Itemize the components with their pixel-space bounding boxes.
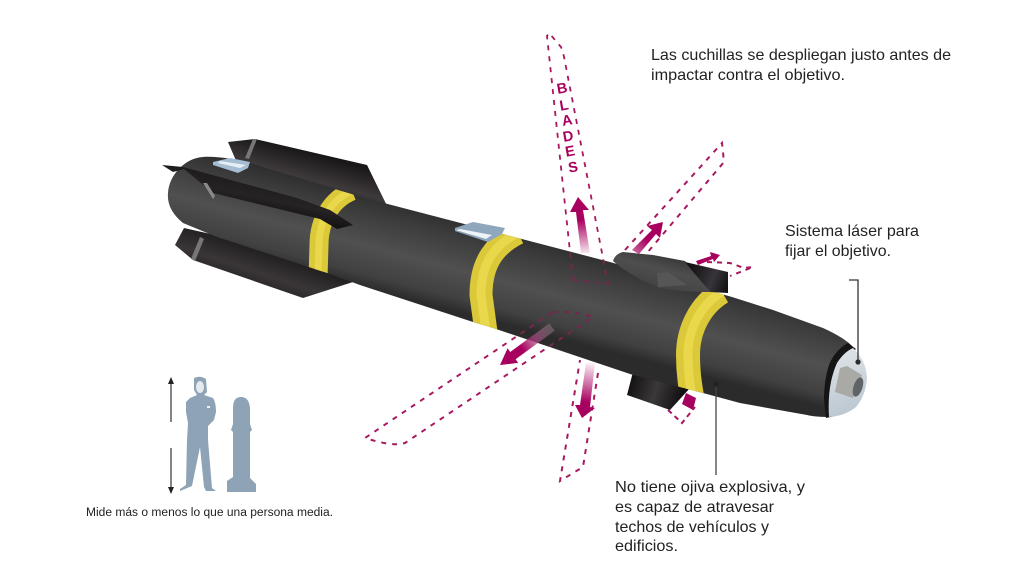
text: blades deploy (651, 47, 951, 84)
arrow: lower left (500, 323, 555, 365)
blade outline: top with label (547, 33, 608, 284)
caption: size comparison: Mide más o menos lo que una persona media. (86, 507, 333, 519)
text: laser system: Sistema láser para (785, 223, 919, 240)
clip: middle (455, 222, 505, 242)
text: no warhead: es capaz de atravesar (615, 499, 775, 516)
leader line: laser (849, 280, 861, 365)
label: BLADES: L (558, 97, 570, 115)
text: no warhead: No tiene ojiva explosiva, y (615, 479, 805, 496)
blade outline: small bottom right (668, 407, 695, 423)
text: blades deploy: Las cuchillas se despliegan justo antes de (651, 47, 951, 64)
label: BLADES (556, 80, 580, 177)
label: BLADES: B (556, 80, 569, 98)
arrow: up (570, 197, 590, 253)
front fairing (613, 252, 710, 292)
label: BLADES: D (562, 128, 575, 146)
text: no warhead (615, 479, 805, 555)
leader line: warhead (713, 381, 719, 475)
icon: missile silhouette (227, 397, 256, 492)
rear fin: near side (162, 165, 353, 229)
missile body (168, 157, 853, 417)
blade outlines dimmed over body (520, 253, 609, 346)
blade outline: lower left (365, 312, 593, 444)
height arrow (168, 377, 174, 494)
blade outline: bottom (560, 360, 598, 481)
rear fin: top (228, 139, 393, 218)
label: BLADES: E (564, 143, 577, 161)
text: blades deploy: impactar contra el objetivo. (651, 67, 845, 84)
text: laser system (785, 223, 919, 260)
arrow: far right (696, 252, 720, 265)
blade outline: far right (707, 262, 753, 276)
yellow bands (318, 191, 722, 396)
nose tip (824, 343, 867, 418)
blade outline: upper right (625, 143, 724, 253)
front fin: top (685, 262, 728, 293)
label: BLADES: S (567, 159, 580, 177)
arrow: small bottom right (682, 393, 696, 410)
rear fin: bottom (175, 228, 370, 298)
clip: rear (213, 158, 250, 173)
text: laser system: fijar el objetivo. (785, 243, 891, 260)
arrow: down (575, 363, 595, 418)
arrow: upper right (632, 222, 663, 254)
icon: person silhouette (180, 377, 216, 491)
label: BLADES: A (561, 112, 574, 130)
infographic: blade missile (87, 34, 950, 551)
text: no warhead: edificios. (615, 538, 678, 555)
text: no warhead: techos de vehículos y (615, 519, 769, 536)
front fin: bottom (627, 372, 690, 410)
